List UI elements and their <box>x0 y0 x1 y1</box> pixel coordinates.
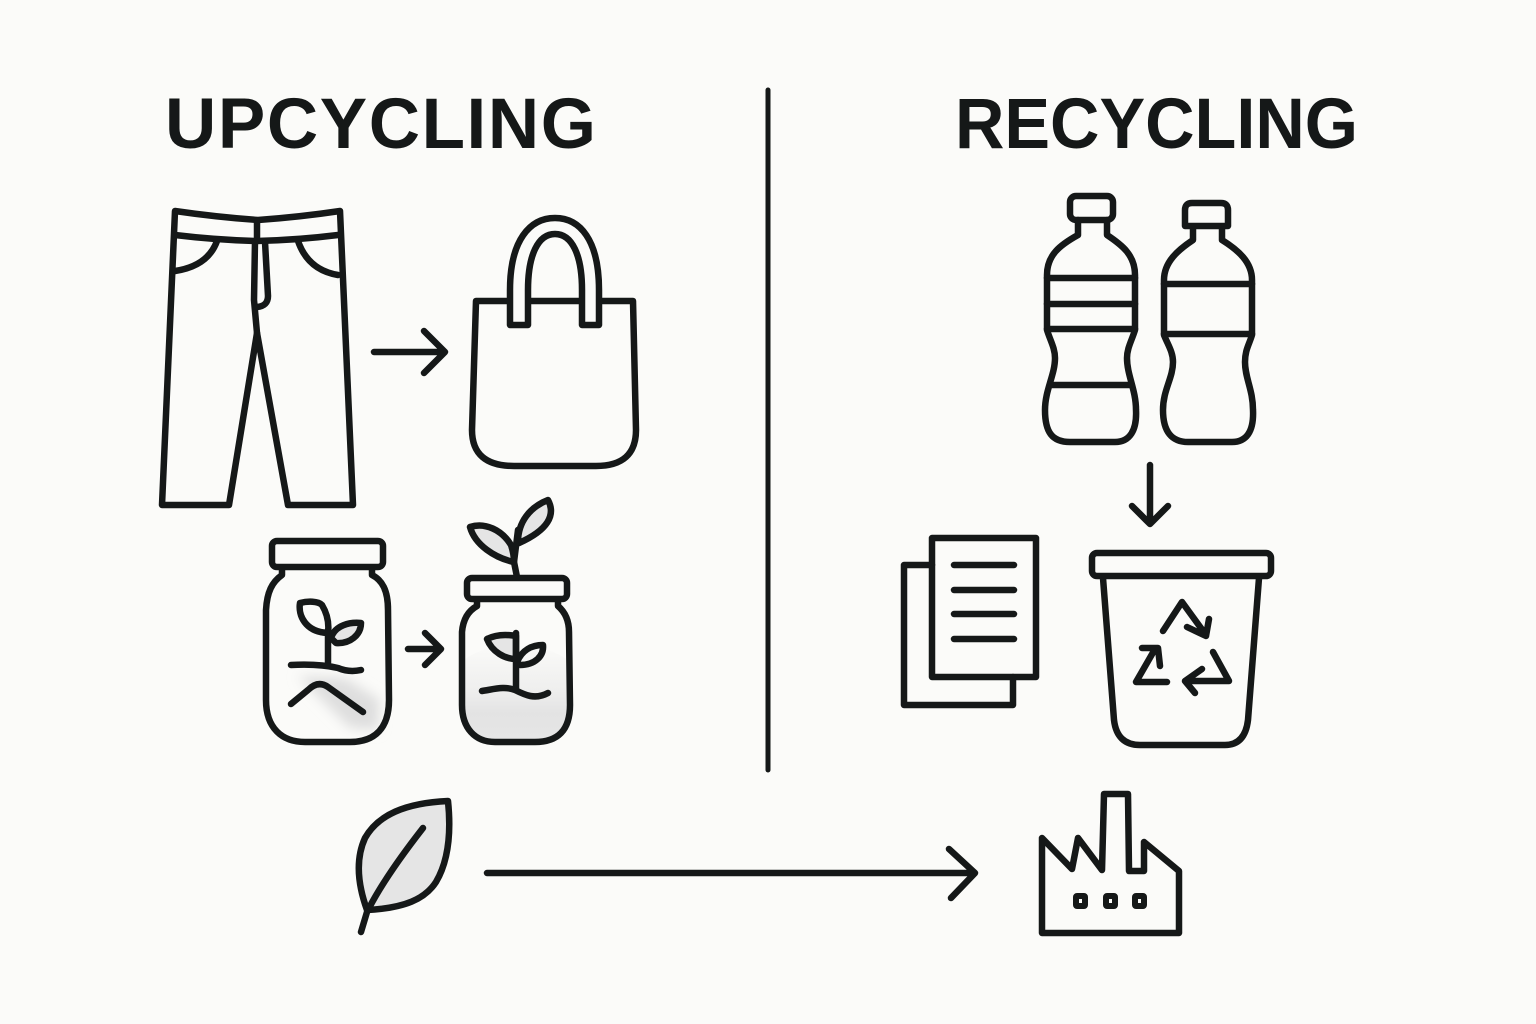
arrow: jar to jar <box>408 633 441 665</box>
arrow: bottles to bin <box>1132 465 1168 524</box>
arrow: jeans to bag <box>374 331 445 373</box>
bottom flow: leaf to factory <box>359 794 1179 933</box>
panel: recycling <box>904 85 1358 745</box>
icon: recycling arrows <box>1136 602 1229 693</box>
divider <box>766 90 770 770</box>
heading: upcycling: UPCYCLING <box>165 85 596 164</box>
panel: upcycling <box>162 85 636 742</box>
icon: factory <box>1042 794 1179 933</box>
icon: recycling bin <box>1092 553 1271 745</box>
icon: leaf <box>359 801 449 932</box>
icon: jeans <box>162 211 353 505</box>
icon: jar with seedling <box>266 541 389 742</box>
icon: paper documents <box>904 538 1036 705</box>
heading: recycling: RECYCLING <box>955 85 1358 164</box>
icon: tote bag <box>472 218 636 466</box>
arrow: nature to industry <box>487 849 975 898</box>
icon: plastic bottles <box>1045 196 1253 442</box>
icon: jar with growing plant <box>462 500 570 742</box>
